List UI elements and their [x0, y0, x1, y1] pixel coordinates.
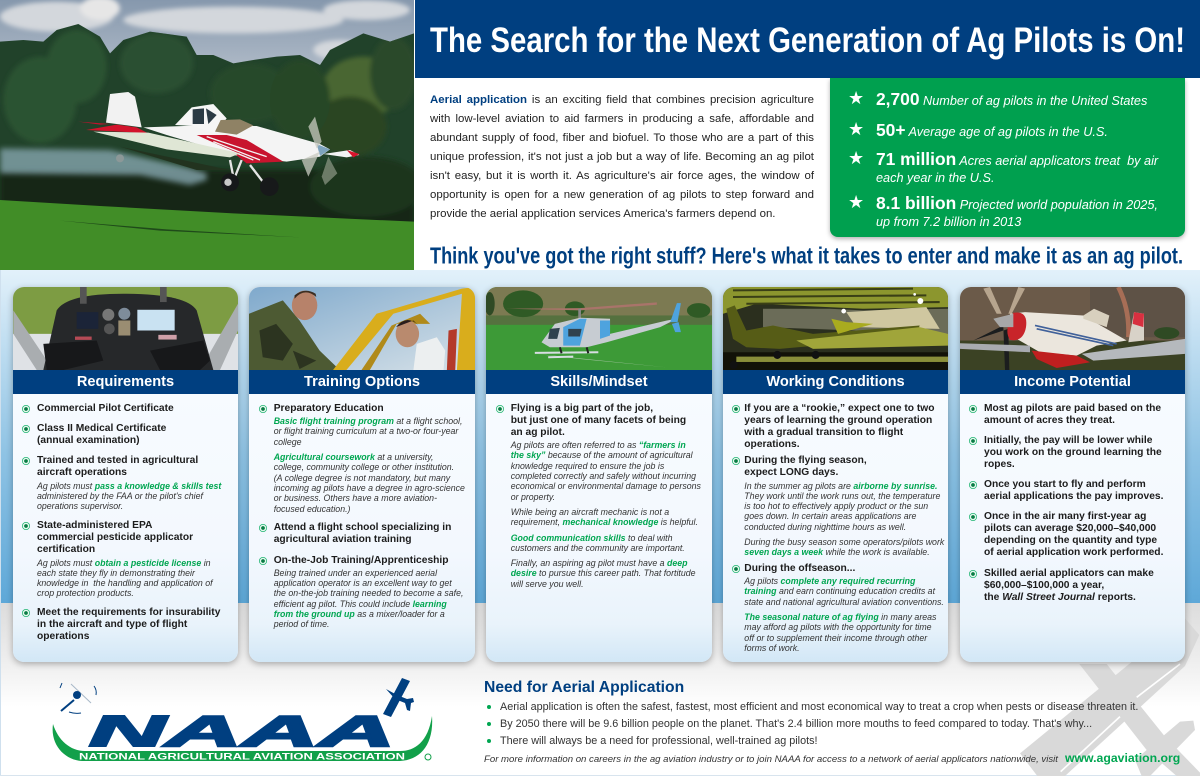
note: Ag pilots must pass a knowledge & skills test [37, 480, 221, 490]
hero photo: crop duster spraying [0, 0, 414, 270]
bottom page edge [0, 775, 1200, 776]
note: knowledge required to ensure the job is [511, 461, 664, 471]
item: Skilled aerial applicators can make [984, 568, 1154, 579]
item: expect LONG days. [744, 467, 838, 478]
note: Ag pilots are often referred to as “farmers in [511, 440, 686, 450]
note [744, 537, 944, 557]
website: www.agaviation.org [1065, 751, 1180, 765]
footer line: For more information on careers in the ag aviation industry or to join NAAA for access to a network of aerial applicators nationwide, visit [484, 754, 1058, 765]
item: ropes. [984, 459, 1015, 470]
item: If you are a “rookie,” expect one to two [744, 403, 935, 414]
photo: pilots [249, 287, 475, 370]
heading: income potential [960, 370, 1185, 394]
item: Attend a flight school specializing in [274, 522, 451, 533]
item: Preparatory Education [274, 403, 384, 414]
note [36, 558, 214, 598]
note: is too hot to effectively apply product or the sun [744, 501, 928, 511]
stat: acres: 71 million Acres aerial applicators treat by air [876, 149, 1158, 169]
logo helicopter [60, 683, 96, 713]
item: agricultural aviation training [274, 534, 412, 545]
item: years of learning the ground operation [744, 415, 932, 426]
note: Agricultural coursework at a university, [274, 452, 433, 462]
background panel [0, 270, 1200, 776]
stat: population: up from 7.2 billion in 2013 [876, 215, 1021, 229]
item: in the aircraft and type of flight [37, 619, 187, 630]
note: college [274, 437, 302, 447]
note: training and earn continuing education credits at [744, 586, 935, 596]
logo plane right [383, 678, 414, 717]
logo letters: NAAA [89, 707, 395, 756]
stats panel: ★ [848, 88, 864, 108]
item: (annual examination) [37, 435, 140, 446]
heading: need for aerial application: Need for Aerial Application [484, 679, 684, 696]
stat: acres: each year in the U.S. [876, 171, 994, 185]
heading: training options: Training Options [304, 374, 420, 390]
registered mark [425, 754, 431, 760]
heading: skills/mindset [486, 370, 712, 394]
note: may afford ag pilots with the opportunity for time [744, 622, 932, 632]
item: aerial applications the pay improves. [984, 491, 1163, 502]
photo: helicopter [486, 287, 712, 370]
intro paragraph [430, 94, 814, 220]
note: period of time. [274, 619, 329, 629]
note: the sky” because of the amount of agricultural [511, 450, 693, 460]
note: operations supervisor. [37, 501, 123, 511]
bullet: There will always be a need for professional, well-trained ag pilots! [500, 735, 817, 747]
note [274, 568, 463, 629]
item [732, 455, 867, 478]
note [511, 532, 685, 553]
left page edge [0, 270, 1, 776]
panel: skills/mindset [486, 287, 712, 662]
stat: acres [848, 148, 1158, 185]
logo name: NATIONAL AGRICULTURAL AVIATION ASSOCIATION [79, 752, 405, 762]
item: During the flying season, [744, 455, 867, 466]
item: $60,000–$100,000 a year, [984, 580, 1104, 591]
header band [415, 0, 1200, 78]
intro paragraph: provide the aerial application services America's farmers depend on. [430, 208, 776, 220]
heading: working conditions: Working Conditions [766, 374, 905, 390]
note: application operator is an excellent way to get [274, 578, 452, 588]
note [274, 452, 465, 514]
note: state and national agricultural aviation conventions. [744, 597, 944, 607]
intro paragraph: Aerial application is an exciting field that combines precision agriculture [430, 94, 814, 106]
photo: cockpit [13, 287, 238, 370]
item [22, 520, 193, 555]
note: seven days a week while the work is available. [744, 547, 930, 557]
item: Flying is a big part of the job, [511, 403, 653, 414]
item: Meet the requirements for insurability [37, 607, 220, 618]
note: Good communication skills to deal with [511, 532, 673, 542]
item: aircraft operations [37, 467, 127, 478]
note: economical or environmental damage to persons [511, 481, 701, 491]
note: customers and the community are important. [511, 543, 685, 553]
item: operations. [744, 439, 800, 450]
item: with a gradual transition to flight [744, 427, 903, 438]
stats panel: ★ [848, 192, 864, 212]
item: of aerial application work performed. [984, 547, 1163, 558]
note: knowledge in the handling and application of [37, 578, 213, 588]
note: administered by the FAA or the pilot's chief [37, 491, 203, 501]
note: desire to pursue this career path. That fortitude [511, 568, 696, 578]
note: each state they fly in demonstrating their [37, 568, 195, 578]
item: Trained and tested in agricultural [37, 455, 198, 466]
item: an ag pilot. [511, 427, 565, 438]
bullet: By 2050 there will be 9.6 billion people on the planet. That's 2.4 billion more mouths to feed compared to today. That's why... [500, 718, 1092, 730]
note [36, 480, 222, 511]
note: efficient ag pilot. This could include learning [274, 599, 447, 609]
note: off or to supplement their income through other [744, 633, 927, 643]
photo: hangar [723, 287, 948, 370]
bullet: Aerial application is often the safest, fastest, most efficient and most economical way to treat a crop when pests or disease threaten it. [500, 701, 1138, 713]
note: focused education.) [274, 504, 350, 514]
watermark plane [1020, 622, 1200, 776]
note: from the ground up as a mixer/loader for a [274, 609, 445, 619]
stats panel: ★ [848, 119, 864, 139]
heading: training options [249, 370, 475, 394]
intro paragraph: isn't easy, but it is worth it. As agriculture's air force ages, the window of [430, 170, 814, 182]
stat: population: 8.1 billion Projected world population in 2025, [876, 193, 1158, 213]
note [744, 480, 940, 532]
note: They work until the work runs out, the temperature [744, 491, 940, 501]
stat: ag pilots: 2,700 Number of ag pilots in the United States [876, 89, 1147, 109]
panel: working conditions [723, 287, 948, 662]
note: will serve you well. [511, 579, 584, 589]
item: depending on the quantity and type [984, 535, 1157, 546]
item [984, 479, 1163, 503]
note: crop protection products. [37, 588, 134, 598]
item [969, 403, 1161, 426]
panel: requirements [13, 287, 238, 662]
item [22, 607, 220, 642]
item: operations [37, 631, 89, 642]
stats panel [830, 78, 1185, 237]
intro paragraph: with low-level aviation to aid farmers in producing a safe, affordable and [430, 113, 814, 125]
item [22, 423, 166, 446]
item [496, 403, 686, 438]
heading: working conditions [723, 370, 948, 394]
item: but just one of many facets of being [511, 415, 686, 426]
stat: population [848, 192, 1158, 229]
note [274, 416, 462, 447]
note: forms of work. [744, 643, 800, 653]
note: During the busy season some operators/pilots work [744, 537, 944, 547]
note [510, 506, 698, 527]
background lower fade [0, 603, 1200, 776]
intro paragraph: abundant supply of food, fiber and biofuel. To those who are a part of this [430, 132, 814, 144]
item: you work on the ground learning the [984, 447, 1162, 458]
note: Basic flight training program at a flight school, [274, 416, 462, 426]
note: Ag pilots complete any required recurring [744, 576, 915, 586]
intro paragraph: opportunity is open for a new generation of ag pilots to step forward and [430, 189, 814, 201]
note: incoming ag pilots have a degree in agro-science [274, 483, 465, 493]
note [744, 576, 944, 607]
heading: requirements [13, 370, 238, 394]
item: Most ag pilots are paid based on the [984, 403, 1161, 414]
note: or property. [511, 492, 555, 502]
item: During the offseason... [744, 563, 855, 574]
note [511, 558, 696, 589]
item: Once in the air many first-year ag [984, 511, 1146, 522]
item: Commercial Pilot Certificate [37, 403, 174, 414]
heading: income potential: Income Potential [1014, 374, 1131, 390]
note: In the summer ag pilots are airborne by sunrise. [744, 480, 937, 490]
item [732, 403, 935, 450]
note: Being trained under an experienced aerial [274, 568, 437, 578]
note [510, 440, 701, 502]
note: the on-the-job training needed to become a safe, [274, 588, 463, 598]
item [22, 455, 198, 478]
stat: average age: 50+ Average age of ag pilots in the U.S. [876, 120, 1108, 140]
note: or flight training curriculum at a two-or four-year [274, 426, 458, 436]
item: amount of acres they treat. [984, 415, 1115, 426]
note: The seasonal nature of ag flying in many areas [744, 612, 936, 622]
item: pilots can average $20,000–$40,000 [984, 523, 1156, 534]
item: Once you start to fly and perform [984, 479, 1146, 490]
item [984, 568, 1154, 604]
note: While being an aircraft mechanic is not a [511, 506, 669, 516]
heading: requirements: Requirements [77, 374, 174, 390]
note [744, 612, 936, 653]
item: State-administered EPA [37, 520, 152, 531]
item [259, 522, 451, 545]
item: Initially, the pay will be lower while [984, 435, 1152, 446]
item: On-the-Job Training/Apprenticeship [274, 555, 449, 566]
intro paragraph: unique profession, it's not just a job but a way of life. Becoming an ag pilot [430, 151, 814, 163]
note: college, community college or other institution. [274, 462, 454, 472]
item: the Wall Street Journal reports. [984, 592, 1136, 603]
note: requirement, mechanical knowledge is helpful. [511, 517, 698, 527]
note: Ag pilots must obtain a pesticide license in [37, 558, 211, 568]
note: or business. Others have a more aviation- [274, 493, 437, 503]
item: certification [37, 544, 95, 555]
note: conducted during nighttime hours as well. [744, 522, 906, 532]
heading: skills/mindset: Skills/Mindset [550, 374, 648, 390]
item: commercial pesticide applicator [37, 532, 193, 543]
panel: income potential [960, 287, 1185, 662]
stats panel: ★ [848, 148, 864, 168]
photo: plane under rainbow [960, 287, 1185, 370]
note: completed correctly and safely without incurring [511, 471, 696, 481]
panel: training options [249, 287, 475, 662]
logo swoosh [53, 716, 432, 761]
item [984, 511, 1163, 559]
note: Finally, an aspiring ag pilot must have a deep [511, 558, 688, 568]
item: Class II Medical Certificate [37, 423, 166, 434]
note: goes down. In certain areas applications are [744, 511, 916, 521]
item [969, 435, 1162, 470]
logo: NAAA [40, 670, 450, 775]
note: (A college degree is not mandatory, but many [274, 473, 450, 483]
